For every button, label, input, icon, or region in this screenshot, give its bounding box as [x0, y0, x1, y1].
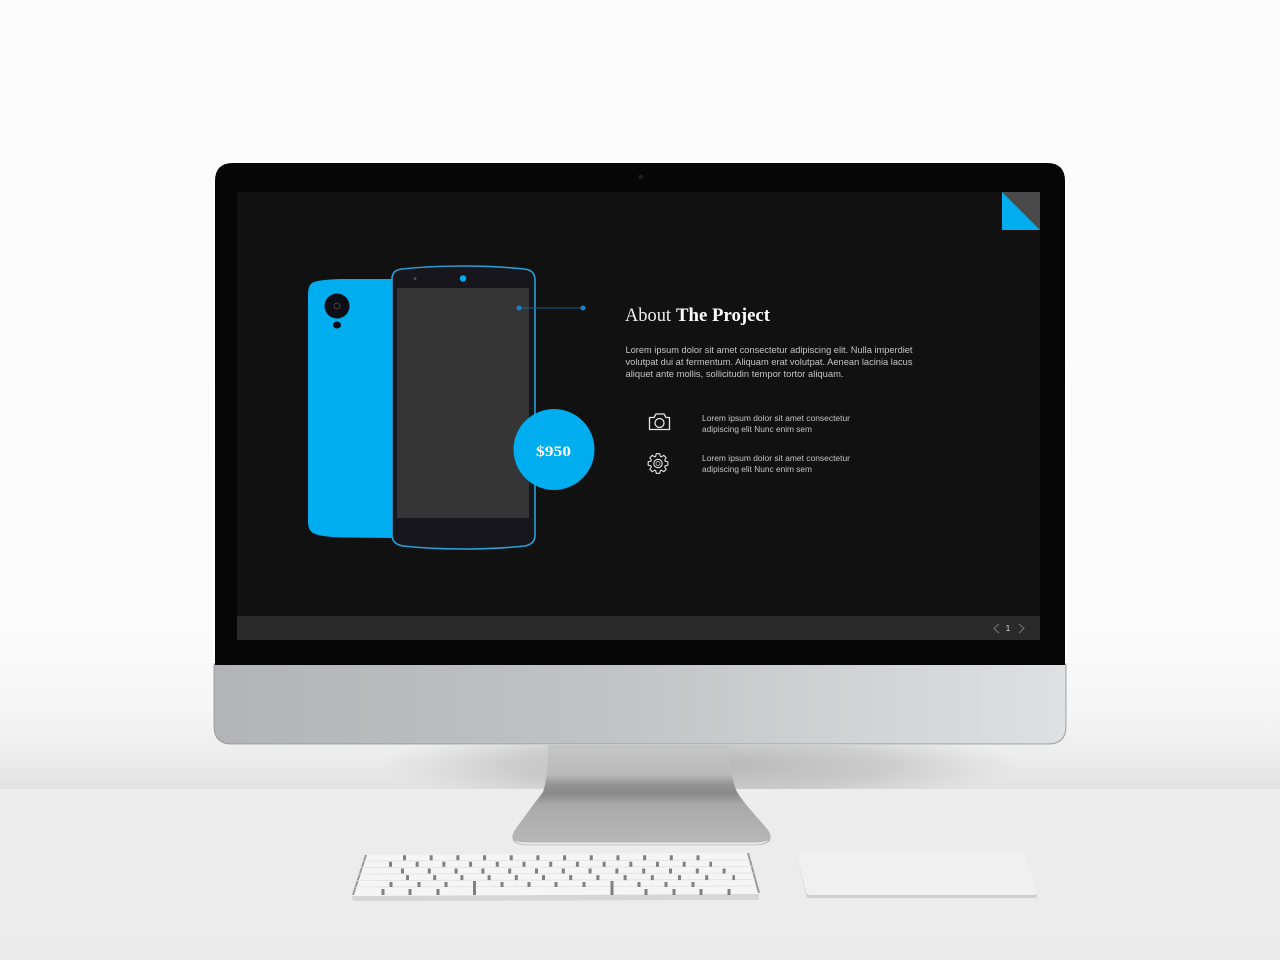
monitor stand: [512, 744, 771, 845]
description text: [626, 345, 913, 380]
pagination: [994, 623, 1024, 633]
key row gaps: [355, 860, 756, 887]
feature text: gear: adipiscing elit Nunc enim sem: [702, 464, 812, 474]
description text: aliquet ante mollis, sollicitudin tempor tortor aliquam.: [626, 369, 844, 380]
key separators: [383, 858, 735, 895]
feature text: gear: Lorem ipsum dolor sit amet consectetur: [702, 453, 850, 463]
keyboard: [352, 853, 759, 901]
price badge: $950: [536, 444, 571, 460]
monitor bezel: [215, 163, 1065, 665]
slide background: [237, 192, 1040, 640]
speaker sensor: [414, 277, 416, 280]
monitor chin: [214, 664, 1066, 744]
heading: [625, 305, 771, 326]
phone front: [392, 266, 535, 549]
trackpad: [797, 852, 1037, 898]
description text: Lorem ipsum dolor sit amet consectetur adipiscing elit. Nulla imperdiet: [626, 345, 913, 356]
rear camera: [324, 294, 350, 318]
icon: camera: [650, 414, 670, 430]
front camera: [460, 275, 466, 282]
heading: About: [625, 305, 672, 326]
keyboard edges: [353, 853, 759, 895]
desk surface: [0, 789, 1280, 960]
feature text: gear: [702, 453, 850, 474]
rear flash: [333, 322, 341, 328]
feature text: camera: Lorem ipsum dolor sit amet consectetur: [702, 413, 850, 423]
wall shadow behind stand: [380, 723, 1020, 807]
keyboard body: [352, 853, 759, 901]
monitor outer edge: [213, 161, 1067, 745]
price badge: [514, 409, 594, 490]
slide footer bar: [237, 616, 1040, 640]
description text: volutpat dui at fermentum. Aliquam erat volutpat. Aenean lacinia lacus: [626, 357, 913, 368]
pagination: 1: [1006, 623, 1011, 633]
phone screen: [397, 288, 529, 518]
callout line: [516, 306, 586, 310]
slide screen: [237, 192, 1040, 640]
heading: The Project: [676, 305, 771, 326]
feature text: camera: [702, 413, 850, 434]
icon: gear: [648, 454, 668, 473]
feature text: camera: adipiscing elit Nunc enim sem: [702, 424, 812, 434]
webcam: [638, 174, 644, 180]
monitor: [213, 161, 1067, 745]
corner ribbon: [1002, 192, 1040, 230]
phone back: [308, 279, 392, 538]
